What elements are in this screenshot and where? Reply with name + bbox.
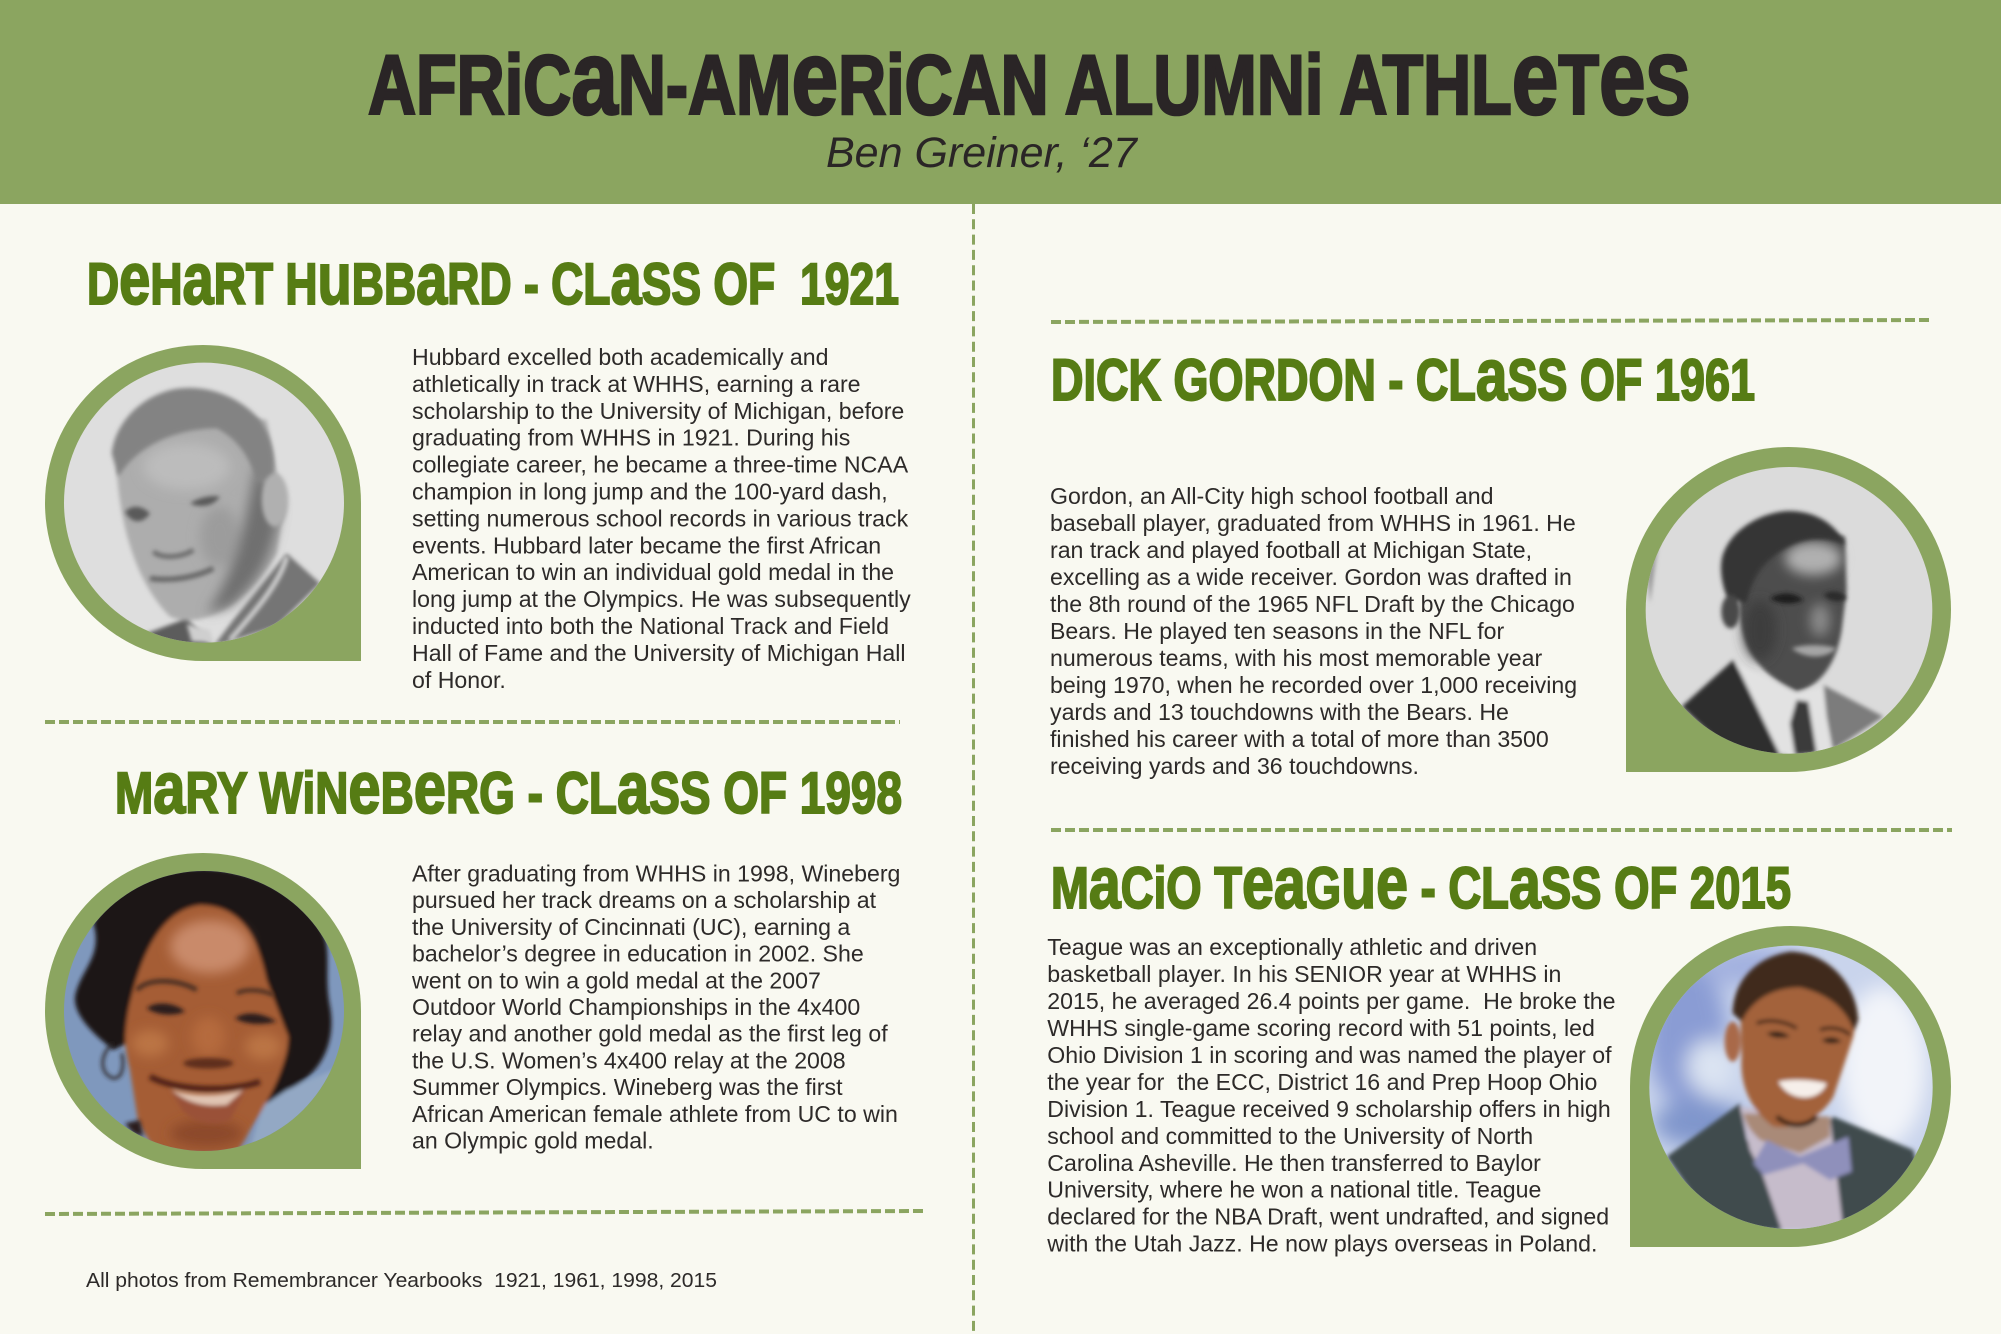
icon: teardrop frame <box>45 345 361 661</box>
text block: Teague bio: Ohio Division 1 in scoring and was named the player of <box>1047 1042 1612 1068</box>
text block: Hubbard bio: collegiate career, he became a three-time NCAA <box>412 452 909 478</box>
text block: Hubbard bio: Hall of Fame and the University of Michigan Hall <box>412 640 906 666</box>
text block: Wineberg bio: pursued her track dreams on a scholarship at <box>412 887 877 913</box>
text block: Wineberg bio: went on to win a gold medal at the 2007 <box>411 967 821 993</box>
panel: Dick Gordon <box>1050 335 1951 779</box>
panel: Macio Teague <box>1046 843 1951 1257</box>
text block: Wineberg bio: Summer Olympics. Wineberg was the first <box>412 1074 843 1100</box>
text block: Teague bio: WHHS single-game scoring record with 51 points, led <box>1047 1015 1595 1041</box>
text block: Teague bio: the year for the ECC, District 16 and Prep Hoop Ohio <box>1047 1069 1597 1095</box>
icon: teardrop frame <box>1626 447 1951 772</box>
photo: Hubbard <box>60 357 350 650</box>
icon: teardrop frame <box>1630 926 1951 1247</box>
text block: Hubbard bio: champion in long jump and the 100-yard dash, <box>412 478 888 504</box>
text block: Wineberg bio: the U.S. Women’s 4x400 relay at the 2008 <box>412 1047 846 1073</box>
text block: Hubbard bio: athletically in track at WHHS, earning a rare <box>412 371 861 397</box>
text block: Gordon bio: Bears. He played ten seasons in the NFL for <box>1050 618 1504 644</box>
heading: Gordon: DICK GORDON - CLaSS OF 1961 <box>1051 335 1755 416</box>
text block: Hubbard bio: of Honor. <box>412 667 506 693</box>
header band <box>0 0 2001 204</box>
text block: Gordon bio: yards and 13 touchdowns with the Bears. He <box>1050 699 1509 725</box>
text block: Wineberg bio: an Olympic gold medal. <box>412 1128 654 1154</box>
vertical dashed divider <box>972 204 975 1334</box>
subtitle: Ben Greiner, ‘27 <box>826 129 1139 177</box>
text block: Hubbard bio: American to win an individual gold medal in the <box>412 559 894 585</box>
title: AFRiCaN-AMeRiCAN ALUMNi ATHLeTeS <box>368 19 1690 137</box>
text block: Teague bio: basketball player. In his SENIOR year at WHHS in <box>1047 961 1561 987</box>
text block: Hubbard bio: Hubbard excelled both academically and <box>412 344 829 370</box>
heading: Teague: MaCiO TeaGue - CLaSS OF 2015 <box>1051 843 1791 924</box>
heading: Hubbard: DeHaRT HuBBaRD - CLaSS OF 1921 <box>87 239 899 320</box>
text block: Hubbard bio: scholarship to the University of Michigan, before <box>412 398 904 424</box>
text block: Gordon bio: Gordon, an All-City high school football and <box>1050 483 1494 509</box>
panel: Dehart Hubbard <box>45 239 911 693</box>
text block: Wineberg bio: After graduating from WHHS in 1998, Wineberg <box>412 860 900 886</box>
text block: Gordon bio: being 1970, when he recorded over 1,000 receiving <box>1050 672 1577 698</box>
text block: Gordon bio: the 8th round of the 1965 NFL Draft by the Chicago <box>1050 591 1575 617</box>
text block: Teague bio: Teague was an exceptionally athletic and driven <box>1047 934 1537 960</box>
text block: Wineberg bio: African American female athlete from UC to win <box>412 1101 898 1127</box>
footer credit: All photos from Remembrancer Yearbooks 1921, 1961, 1998, 2015 <box>86 1269 717 1292</box>
panel: Mary Wineberg <box>45 748 902 1169</box>
text block: Hubbard bio: events. Hubbard later became the first African <box>412 532 881 558</box>
text block: Hubbard bio: long jump at the Olympics. He was subsequently <box>412 586 911 612</box>
text block: Hubbard bio: setting numerous school records in various track <box>412 505 909 531</box>
text block: Wineberg bio: bachelor’s degree in education in 2002. She <box>412 941 864 967</box>
text block: Gordon bio: numerous teams, with his most memorable year <box>1050 645 1543 671</box>
text block: Gordon bio: finished his career with a total of more than 3500 <box>1050 726 1549 752</box>
photo: Teague <box>1643 940 1937 1237</box>
icon: teardrop frame <box>45 853 361 1169</box>
text block: Gordon bio: ran track and played football at Michigan State, <box>1050 537 1532 563</box>
text block: Gordon bio: receiving yards and 36 touchdowns. <box>1050 753 1419 779</box>
text block: Wineberg bio: relay and another gold medal as the first leg of <box>412 1021 888 1047</box>
text block: Gordon bio: excelling as a wide receiver. Gordon was drafted in <box>1050 564 1572 590</box>
text block: Teague bio: Carolina Asheville. He then transferred to Baylor <box>1047 1150 1541 1176</box>
text block: Wineberg bio: Outdoor World Championships in the 4x400 <box>412 994 860 1020</box>
text block: Teague bio: 2015, he averaged 26.4 points per game. He broke the <box>1047 988 1616 1014</box>
photo: Gordon <box>1643 463 1937 760</box>
text block: Gordon bio: baseball player, graduated from WHHS in 1961. He <box>1050 510 1576 536</box>
text block: Teague bio: University, where he won a national title. Teague <box>1047 1177 1541 1203</box>
text block: Teague bio: declared for the NBA Draft, went undrafted, and signed <box>1047 1204 1609 1230</box>
text block: Teague bio: school and committed to the University of North <box>1047 1123 1533 1149</box>
photo: Wineberg <box>60 867 350 1160</box>
text block: Teague bio: Division 1. Teague received 9 scholarship offers in high <box>1047 1096 1611 1122</box>
text block: Teague bio: with the Utah Jazz. He now plays overseas in Poland. <box>1046 1231 1597 1257</box>
text block: Wineberg bio: the University of Cincinnati (UC), earning a <box>412 914 850 940</box>
text block: Hubbard bio: graduating from WHHS in 1921. During his <box>412 425 850 451</box>
heading: Wineberg: MaRY WiNeBeRG - CLaSS OF 1998 <box>115 748 902 829</box>
text block: Hubbard bio: inducted into both the National Track and Field <box>412 613 889 639</box>
